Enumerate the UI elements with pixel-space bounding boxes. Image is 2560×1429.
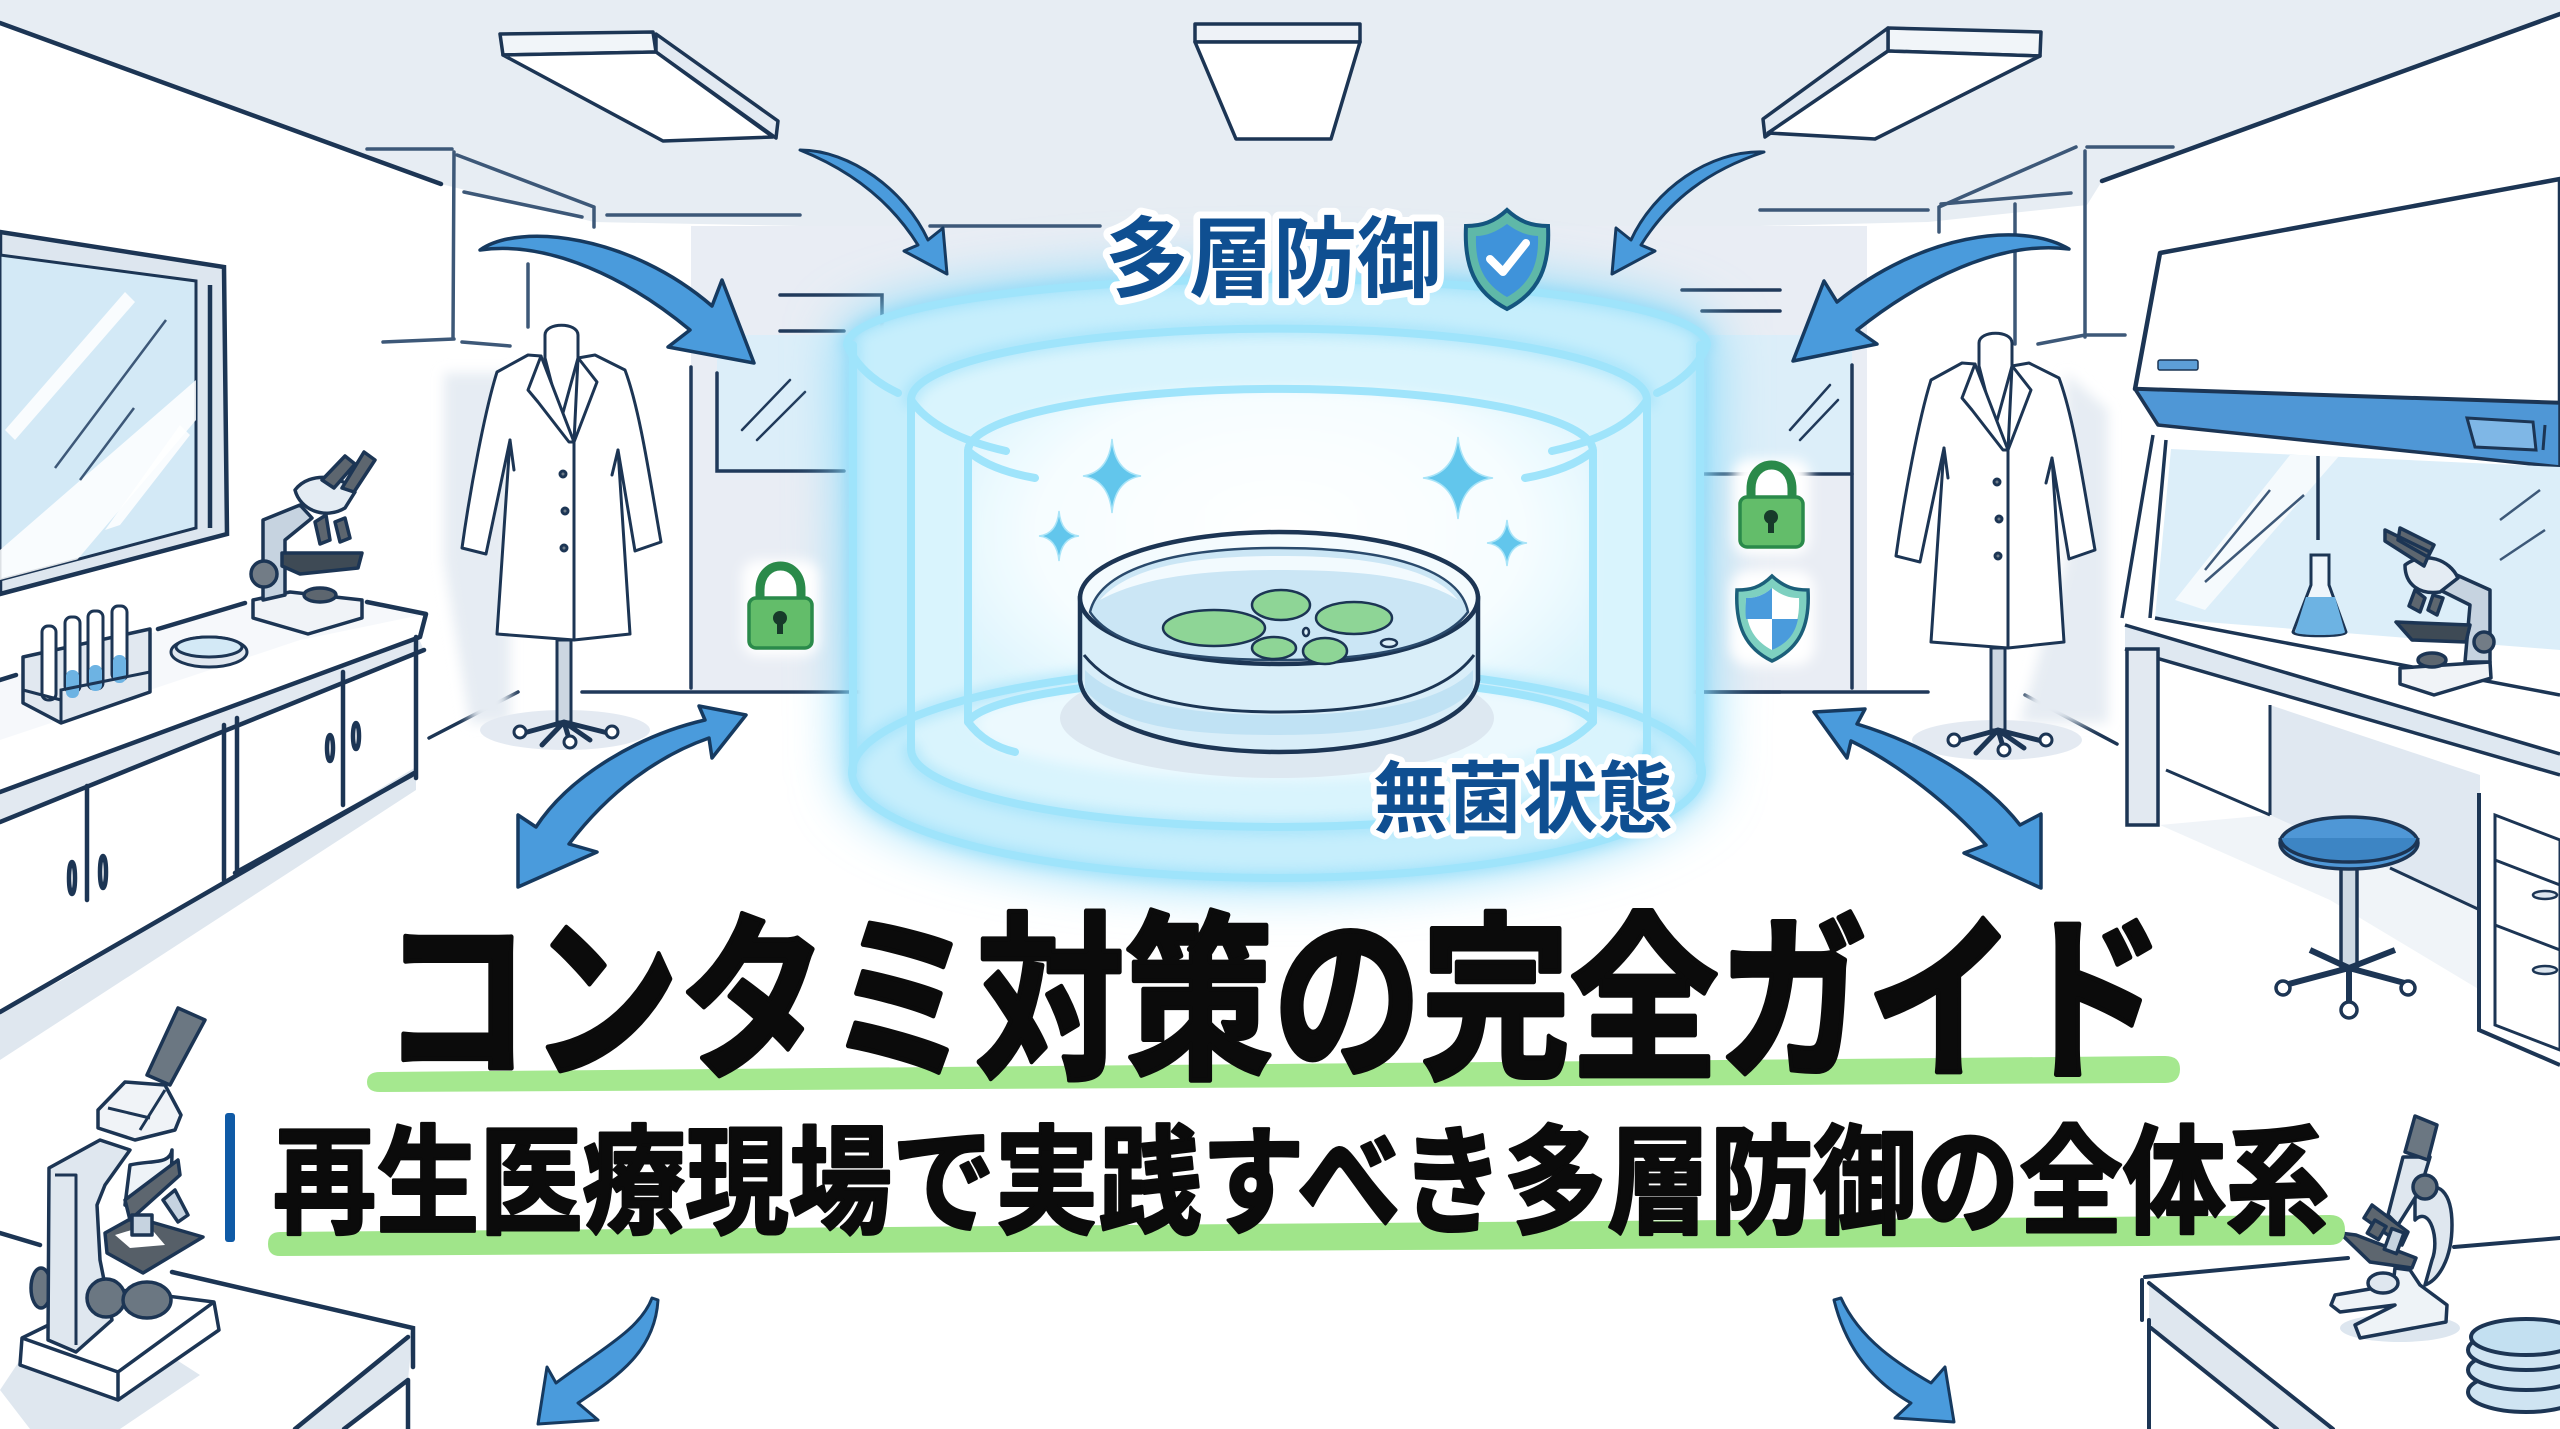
floor shadow left [480, 710, 650, 750]
arrow: top-left small [800, 150, 947, 274]
arrow: top-right small [1612, 152, 1764, 274]
bottom-right table [2142, 1238, 2560, 1429]
label: multilayer defense: 多層防御 [1105, 210, 1441, 309]
ceiling light right [1763, 28, 2041, 139]
hood microscope [2385, 528, 2494, 695]
ceiling [0, 0, 2560, 226]
ceiling light centre [1195, 24, 1360, 139]
arrow: top-left large [480, 236, 754, 363]
arrow: top-right large [1793, 235, 2069, 361]
petri dish with green colonies [1060, 532, 1494, 778]
arrow: lower-left double [518, 706, 746, 887]
subtitle: 再生医療現場で実践すべき多層防御の全体系 [273, 1118, 2329, 1250]
icon: quartered shield right [1730, 570, 1815, 666]
stacked petri dishes [2468, 1319, 2560, 1412]
left lab bench with cabinets [0, 598, 426, 1060]
arrow: bottom-left [538, 1298, 658, 1424]
arrow: lower-right double [1814, 709, 2041, 888]
icon: green lock right [1733, 459, 1810, 555]
coat shadow right [2020, 373, 2108, 723]
small petri dish on bench [171, 637, 247, 667]
bottom-left table [0, 1233, 413, 1429]
title: コンタミ対策の完全ガイド [382, 902, 2164, 1103]
flask [2293, 555, 2346, 636]
right lab desk [2125, 618, 2560, 1065]
back wall panels [528, 226, 1928, 692]
coat shadow left [444, 373, 510, 723]
subtitle highlight [268, 1215, 2345, 1256]
bottom-right microscope [2331, 1116, 2460, 1342]
accent bar [225, 1113, 235, 1242]
protective cylinder layers [847, 279, 1707, 878]
arrow: bottom-right [1834, 1298, 1954, 1422]
glow field behind protective cylinders [840, 268, 1715, 884]
left bench microscope [251, 452, 375, 634]
green colonies [1163, 590, 1397, 664]
floor shadow right [1912, 720, 2082, 760]
left wall window [0, 232, 227, 594]
lab coat on stand, left [462, 325, 661, 748]
ceiling light left [500, 32, 778, 141]
label: sterile state: 無菌状態 [1373, 755, 1673, 843]
lab coat on stand, right [1896, 333, 2095, 756]
icon: green lock left [742, 560, 819, 656]
room corner frames [0, 14, 2560, 744]
test tube rack [23, 606, 150, 723]
sparkles [1039, 437, 1527, 566]
icon: check shield [1466, 210, 1548, 309]
stool [2276, 817, 2418, 1018]
bottom-left microscope [0, 1008, 219, 1429]
biosafety cabinet hood [2122, 179, 2560, 650]
title highlight [367, 1056, 2180, 1092]
